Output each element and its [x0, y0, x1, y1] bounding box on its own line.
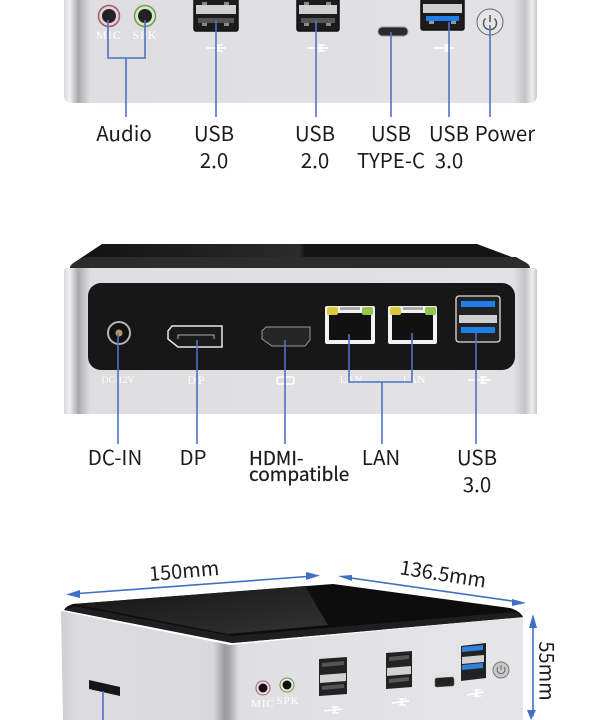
label: HDMI-compatible: HDMI- [249, 444, 304, 471]
port labels MIC and SPK: SPK [132, 28, 158, 42]
port labels: SPK [276, 695, 300, 707]
port: DisplayPort [168, 326, 222, 347]
port: LAN 2 [388, 306, 437, 344]
label: USB 2.0: 2.0 [200, 144, 228, 174]
port: USB 3.0 rear [456, 296, 500, 342]
port: HDMI [262, 327, 310, 346]
port labels MIC and SPK [96, 28, 158, 42]
printed port labels: DP [187, 373, 207, 387]
label: Audio: Audio [96, 117, 152, 147]
label: USB Type-C: TYPE-C [357, 144, 425, 174]
black top lid [70, 244, 530, 268]
callout lines: rear panel [118, 333, 476, 444]
device: front panel view [64, 0, 537, 174]
port: SD card slot [89, 680, 120, 696]
printed port labels: LAN [403, 374, 425, 386]
dimension label: 55mm: 55mm [534, 641, 562, 701]
label: USB 2.0 second: 2.0 [301, 144, 329, 174]
device: perspective view with dimensions [61, 551, 562, 720]
USB symbols [324, 690, 484, 713]
label: DC-IN: DC-IN [88, 441, 142, 471]
label: USB 2.0: USB [194, 117, 234, 147]
port labels [251, 695, 300, 710]
port: USB 3.0 [461, 643, 486, 681]
port: USB Type-C [378, 27, 408, 36]
printed port labels: LAN [340, 374, 362, 386]
port: USB 2.0 [319, 657, 347, 696]
silver front body [64, 0, 537, 103]
printed port labels: DC-12V [102, 376, 134, 386]
left silver face [61, 611, 230, 720]
label: USB 3.0: USB [457, 441, 497, 471]
label: HDMI-compatible: compatible [249, 460, 349, 487]
right silver face [230, 617, 523, 720]
port: LAN 1 [325, 306, 375, 344]
port: DC-IN jack [108, 322, 130, 344]
port: USB 3.0 [421, 0, 464, 30]
black port panel [88, 283, 515, 370]
dimension label: 136.5mm: 136.5mm [398, 551, 488, 594]
black top surface [64, 584, 523, 643]
dimension arrow: height 55mm [527, 614, 537, 720]
icon: SPK audio jack [134, 6, 156, 26]
port labels MIC and SPK: MIC [96, 28, 122, 42]
callout lines: front panel [108, 20, 490, 117]
label: USB 3.0: USB [429, 117, 469, 147]
label: USB Type-C: USB [371, 117, 411, 147]
label: USB 2.0 second: USB [295, 117, 335, 147]
port: USB 2.0 first [194, 0, 238, 31]
icon: power button [493, 662, 509, 678]
label: DP: DP [179, 441, 207, 471]
label: LAN: LAN [362, 441, 400, 471]
callout line: SD slot [102, 691, 104, 720]
label: USB 3.0: 3.0 [435, 144, 463, 174]
icon: power button [477, 9, 503, 35]
dimension arrow: width 150mm [66, 572, 320, 598]
port: USB Type-C [435, 677, 454, 687]
label: USB 3.0: 3.0 [463, 468, 491, 498]
port: USB 2.0 second [297, 0, 339, 31]
dimension label: 150mm: 150mm [148, 552, 220, 587]
icon: MIC audio jack [98, 6, 120, 26]
printed port labels [102, 373, 425, 387]
port: USB 2.0 [386, 651, 412, 689]
icon: SPK jack [280, 678, 294, 692]
device: rear panel view [64, 244, 537, 498]
icon: MIC jack [256, 681, 270, 695]
label: Power: Power [475, 117, 535, 147]
dimension arrow: depth 136.5mm [338, 575, 526, 606]
icon: HDMI symbol and USB symbol [277, 377, 491, 384]
USB symbols [206, 45, 454, 51]
silver rear body [64, 268, 537, 414]
port labels: MIC [251, 698, 275, 710]
